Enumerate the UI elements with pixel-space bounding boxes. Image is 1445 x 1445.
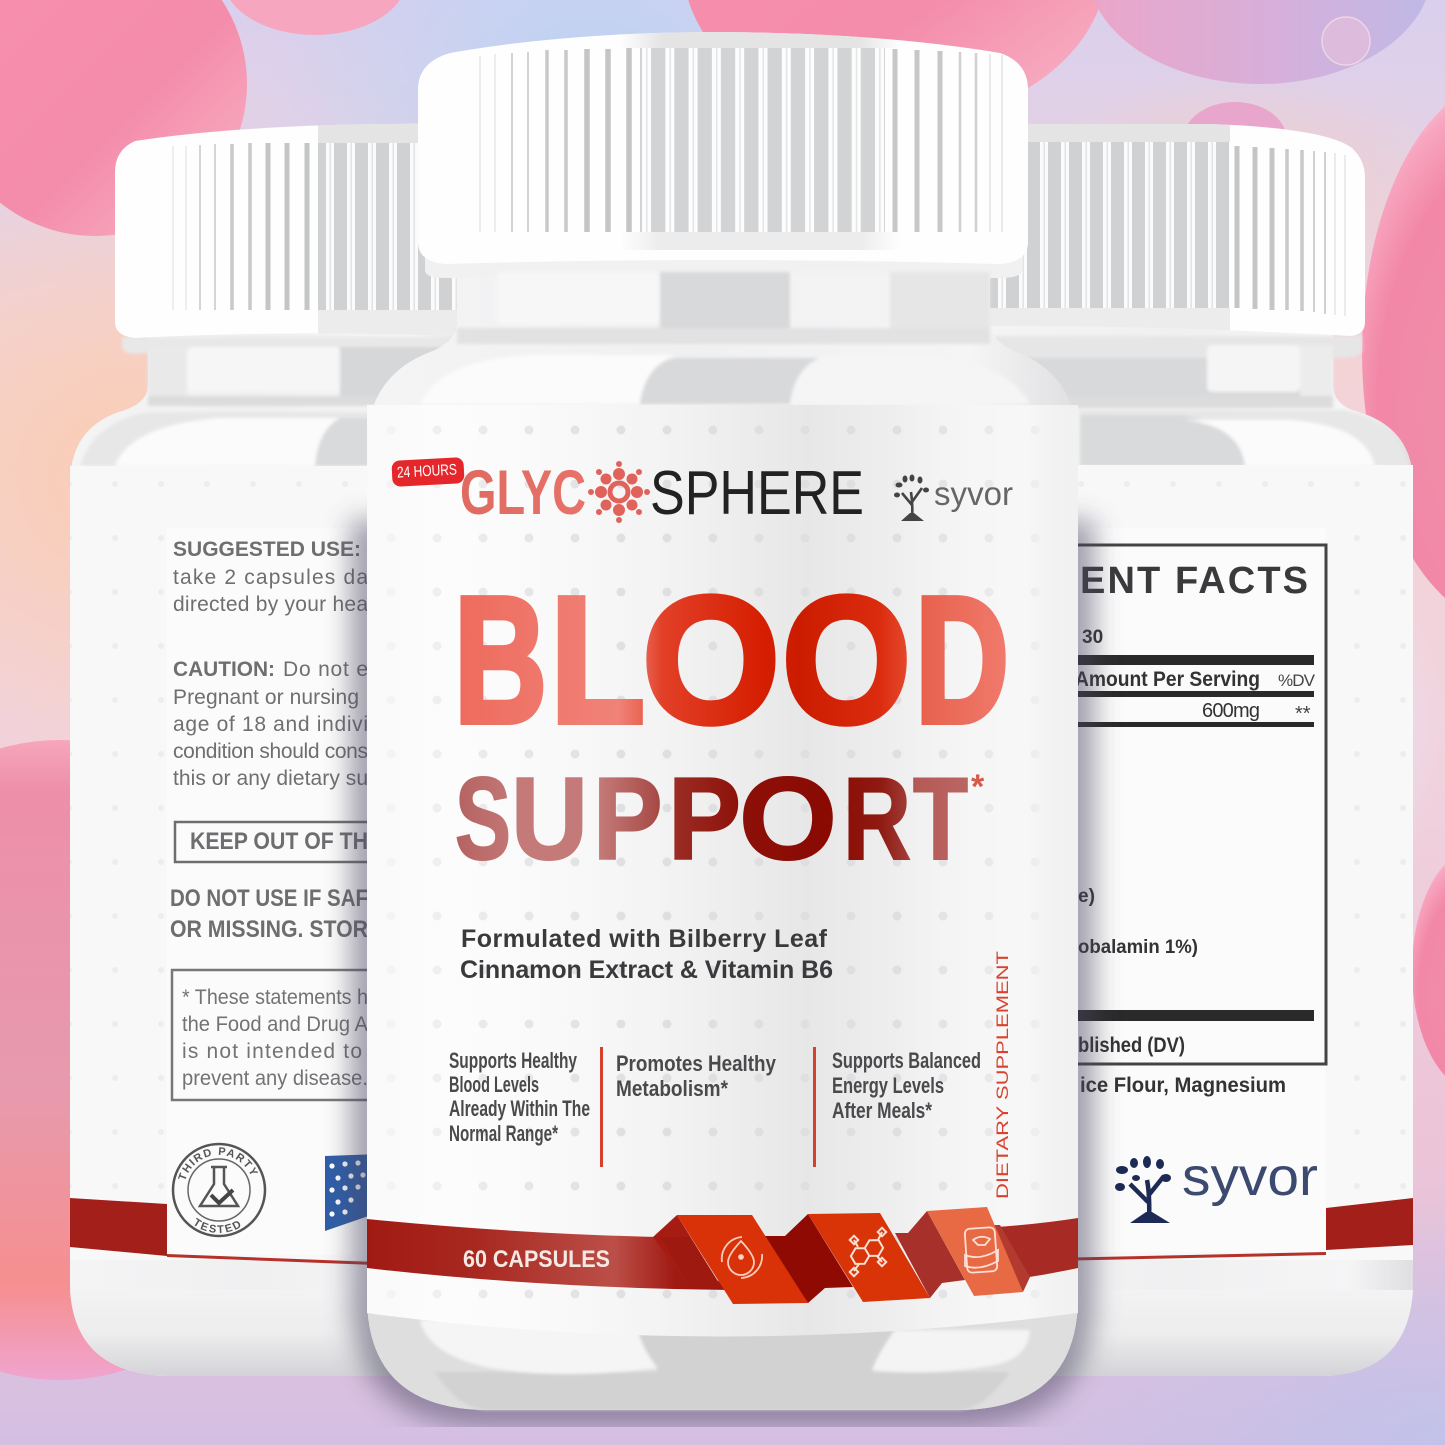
title: support: S bbox=[455, 753, 511, 884]
supplement facts panel: 600mg bbox=[1202, 700, 1260, 722]
left label text: Pregnant or nursing bbox=[173, 686, 359, 709]
title: support: O bbox=[739, 753, 837, 884]
24 hours badge bbox=[391, 457, 465, 487]
left label text: SUGGESTED USE: bbox=[173, 538, 361, 561]
right label bbox=[1050, 465, 1413, 1260]
left label text: directed by your hea bbox=[173, 593, 368, 616]
benefit 1: Normal Range* bbox=[449, 1121, 558, 1146]
disclaimer box: * These statements h bbox=[182, 986, 368, 1009]
left label text: CAUTION: bbox=[173, 658, 275, 681]
supplement facts panel: obalamin 1%) bbox=[1078, 937, 1198, 958]
benefit 3 bbox=[832, 1048, 981, 1123]
benefit 1 bbox=[449, 1048, 590, 1146]
glycosphere logo bbox=[460, 458, 864, 528]
keep out box: KEEP OUT OF TH bbox=[190, 828, 368, 855]
right bottle dome shading bbox=[1080, 410, 1408, 466]
benefit 3: Energy Levels bbox=[832, 1073, 944, 1098]
left label text: Do not e bbox=[283, 658, 368, 681]
formula text: Formulated with Bilberry Leaf bbox=[461, 925, 828, 953]
icon: third party tested seal: THIRD PARTY bbox=[178, 1147, 258, 1179]
supplement facts panel: ENT FACTS bbox=[1080, 560, 1308, 602]
icon: molecule bbox=[849, 1228, 886, 1276]
ribbon panel 1 bbox=[677, 1215, 808, 1304]
left bottle dome shading bbox=[80, 412, 420, 466]
left label text: this or any dietary su bbox=[173, 767, 368, 790]
supplement facts panel: %DV bbox=[1278, 671, 1316, 690]
benefit 1: Blood Levels bbox=[449, 1072, 539, 1097]
warning text bbox=[170, 885, 368, 943]
title: blood: L bbox=[550, 560, 645, 761]
disclaimer box: is not intended to bbox=[182, 1040, 362, 1063]
right bottle body bbox=[980, 320, 1413, 1376]
left bottle cap bbox=[115, 120, 465, 340]
ribbon panel 2 bbox=[808, 1213, 930, 1302]
supplement facts panel: ice Flour, Magnesium bbox=[1080, 1074, 1286, 1097]
neck ring bbox=[425, 258, 1022, 278]
syvor logo: syvor bbox=[934, 475, 1013, 512]
ribbon panel 3 bbox=[927, 1207, 1023, 1296]
title: support bbox=[455, 753, 985, 884]
right neck ring and highlight bbox=[990, 336, 1362, 408]
formula text bbox=[460, 925, 833, 984]
icon: drop cycle bbox=[722, 1237, 762, 1278]
benefit 3: Supports Balanced bbox=[832, 1048, 981, 1073]
benefit 2 bbox=[616, 1051, 777, 1101]
left bottle (back label) bbox=[70, 124, 457, 1376]
formula text: Cinnamon Extract & Vitamin B6 bbox=[460, 956, 833, 984]
benefit 3: After Meals* bbox=[832, 1098, 932, 1123]
title: support: * bbox=[971, 768, 985, 806]
icon: scale bbox=[965, 1227, 998, 1273]
shoulder shading bbox=[420, 355, 1030, 404]
24 hours badge: 24 HOURS bbox=[397, 461, 457, 482]
title: blood: O bbox=[782, 560, 911, 761]
right red band bbox=[1326, 1198, 1413, 1250]
center bottle bbox=[367, 30, 1078, 1410]
left label text bbox=[173, 538, 368, 790]
left neck ring and highlight bbox=[122, 337, 470, 406]
title: support: R bbox=[843, 753, 911, 884]
benefit 1: Already Within The bbox=[449, 1096, 590, 1121]
warning text: DO NOT USE IF SAF bbox=[170, 885, 368, 912]
icon: third party tested seal bbox=[172, 1142, 266, 1238]
left label text: age of 18 and indivi bbox=[173, 713, 368, 736]
disclaimer box bbox=[172, 970, 432, 1100]
right bottle base bbox=[1000, 1290, 1413, 1376]
icon: third party tested seal: TESTED bbox=[194, 1218, 240, 1233]
syvor logo right: syvor bbox=[1182, 1147, 1318, 1207]
warning text: OR MISSING. STOR bbox=[170, 916, 368, 943]
right bottle cap bbox=[990, 120, 1370, 340]
title: support: P bbox=[668, 753, 741, 884]
center label bbox=[367, 405, 1078, 1336]
benefit 2: Metabolism* bbox=[616, 1076, 728, 1101]
icon: sphere bbox=[588, 461, 650, 523]
glycosphere logo: SPHERE bbox=[650, 459, 864, 528]
bottle base shading bbox=[367, 1300, 1078, 1410]
glycosphere logo: GLYC bbox=[460, 458, 586, 528]
center cap bbox=[415, 30, 1031, 266]
syvor logo right bbox=[1115, 1147, 1318, 1223]
title: support: T bbox=[913, 753, 968, 884]
left red band bbox=[70, 1198, 167, 1256]
right bottle (supplement facts) bbox=[980, 120, 1413, 1376]
left label text: condition should cons bbox=[173, 740, 368, 763]
syvor logo bbox=[894, 474, 1013, 521]
left bottle body bbox=[70, 320, 480, 1376]
benefit 2: Promotes Healthy bbox=[616, 1051, 777, 1076]
title: blood: O bbox=[642, 560, 780, 761]
disclaimer box: the Food and Drug A bbox=[182, 1013, 368, 1036]
shadow of centre bottle bbox=[350, 520, 1095, 1427]
neck shading bbox=[457, 272, 990, 344]
dietary supplement vertical text: DIETARY SUPPLEMENT bbox=[993, 951, 1012, 1199]
benefit 1: Supports Healthy bbox=[449, 1048, 578, 1073]
supplement facts panel bbox=[1050, 545, 1326, 1097]
title: support: U bbox=[511, 753, 588, 884]
left label text: take 2 capsules da bbox=[173, 566, 368, 589]
left label bbox=[70, 466, 390, 1260]
icon: us flag bbox=[325, 1154, 380, 1231]
supplement facts panel: blished (DV) bbox=[1078, 1034, 1185, 1057]
supplement facts panel: 30 bbox=[1082, 627, 1103, 648]
red band with ribbon bbox=[367, 1207, 1078, 1304]
title: blood: B bbox=[454, 560, 547, 761]
center bottle shoulders and body bbox=[367, 270, 1078, 1410]
title: blood bbox=[454, 560, 1009, 761]
left bottle base bbox=[70, 1290, 480, 1376]
supplement facts panel: e) bbox=[1078, 886, 1095, 907]
title: blood: D bbox=[915, 560, 1009, 761]
supplement facts panel: ** bbox=[1295, 703, 1311, 725]
benefit columns bbox=[449, 1048, 981, 1146]
supplement facts panel: Amount Per Serving bbox=[1075, 668, 1260, 691]
keep out box bbox=[175, 822, 435, 862]
disclaimer box: prevent any disease. bbox=[182, 1067, 368, 1090]
title: support: P bbox=[593, 753, 662, 884]
60 capsules: 60 CAPSULES bbox=[463, 1246, 610, 1273]
